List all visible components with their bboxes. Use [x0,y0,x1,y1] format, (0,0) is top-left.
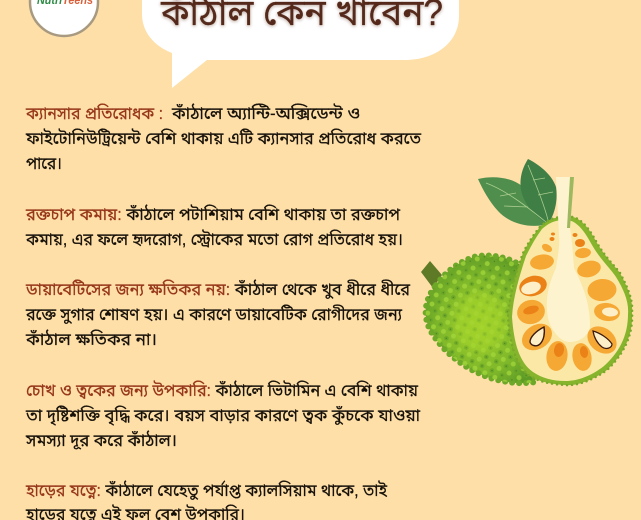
seed pods [514,232,622,372]
benefit: eyes and skin: সমস্যা দূর করে কাঁঠাল। [25,429,177,450]
core and stalk [547,177,590,342]
fruit highlight [454,292,506,352]
benefit: cancer: পারে। [26,154,62,173]
benefit: cancer: ফাইটোনিউট্রিয়েন্ট বেশি থাকায় এটি ক্যানসার প্রতিরোধ করতে [25,128,422,148]
benefit: blood pressure: কমায়, এর ফলে হৃদরোগ, স্ট্রোকের মতো রোগ প্রতিরোধ হয়। [25,229,403,249]
whole fruit [426,255,535,383]
benefit: diabetes: ডায়াবেটিসের জন্য ক্ষতিকর নয়: কাঁঠাল থেকে খুব ধীরে ধীরে [25,278,411,300]
speech bubble title [142,0,459,88]
benefit: cancer: কাঁঠালে অ্যান্টি-অক্সিডেন্ট ও [171,102,360,123]
cream flesh [512,220,628,381]
benefit: cancer [25,102,422,173]
benefit: eyes and skin: তা দৃষ্টিশক্তি বৃদ্ধি করে। বয়স বাড়ার কারণে ত্বক কুঁচকে যাওয়া [25,405,420,426]
benefit: diabetes [25,278,411,349]
benefit: diabetes: কাঁঠাল ক্ষতিকর না। [25,328,157,349]
leaves [478,159,557,226]
benefit: diabetes: রক্তে সুগার শোষণ হয়। এ কারণে ডায়াবেটিক রোগীদের জন্য [25,304,402,325]
icon: jackfruit illustration [421,159,632,385]
benefit: blood pressure: রক্তচাপ কমায়: কাঁঠালে পটাশিয়াম বেশি থাকায় তা রক্তচাপ [25,203,401,224]
logo badge [30,0,98,36]
benefit: eyes and skin: চোখ ও ত্বকের জন্য উপকারি: কাঁঠালে ভিটামিন এ বেশি থাকায় [26,379,418,400]
stalk edge [567,177,574,228]
benefit: bones: হাড়ের যত্নে: কাঁঠালে যেহেতু পর্যাপ্ত ক্যালসিয়াম থাকে, তাই [25,479,388,501]
benefit: blood pressure [25,203,403,249]
benefit: bones [25,479,388,520]
cut fruit half [508,177,632,385]
benefit: cancer: ক্যানসার প্রতিরোধক : [25,103,163,123]
stem [421,261,442,288]
benefit: eyes and skin [25,379,420,450]
